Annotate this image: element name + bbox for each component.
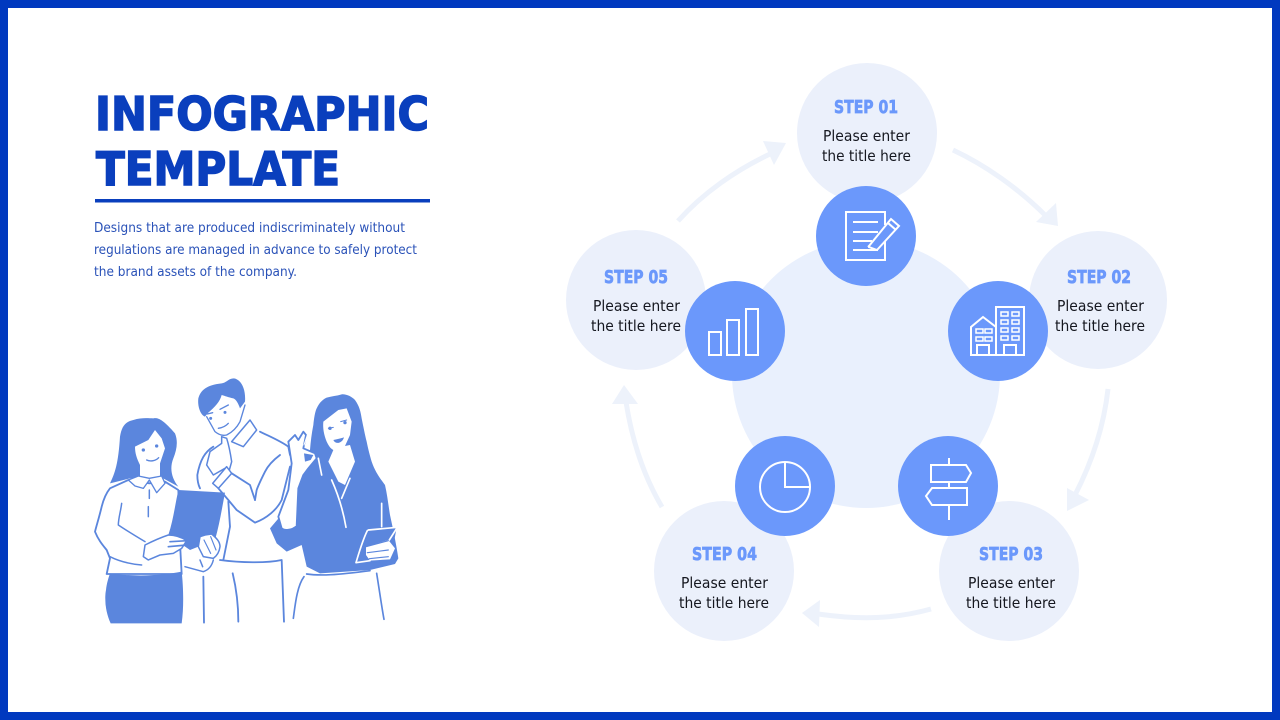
arrow: step 04 to step 05 — [612, 385, 662, 507]
step 02 body: Please enter — [1057, 297, 1145, 315]
step 02 — [948, 231, 1167, 381]
step 05 — [566, 230, 785, 381]
step 01 body: Please enter — [823, 127, 911, 145]
step 04 — [654, 436, 835, 641]
step 03 body: the title here — [966, 594, 1056, 612]
icon: bar chart — [709, 309, 758, 355]
icon: signpost — [926, 458, 971, 520]
description text: Designs that are produced indiscriminately without — [94, 221, 405, 236]
step 03 icon badge — [898, 436, 998, 536]
arrow: step 02 to step 03 — [1067, 389, 1108, 511]
step 05 heading: STEP 05 — [604, 267, 668, 288]
step 01 body: the title here — [822, 147, 911, 165]
step 02 background — [1029, 231, 1167, 369]
illustration: three people with tablets — [95, 378, 398, 623]
step 04 background — [654, 501, 794, 641]
step 01 — [797, 63, 937, 286]
title: INFOGRAPHIC — [95, 87, 429, 141]
step 04 icon badge — [735, 436, 835, 536]
step 01 background — [797, 63, 937, 203]
icon: pie chart — [760, 462, 810, 512]
step 05 body — [591, 297, 681, 335]
step 03 — [898, 436, 1079, 641]
step 05 icon badge — [685, 281, 785, 381]
description text — [94, 221, 417, 280]
step 01 body — [822, 127, 911, 165]
central circle — [732, 240, 1000, 508]
title — [95, 87, 429, 196]
step 05 background — [566, 230, 706, 370]
arrow: step 01 to step 02 — [953, 150, 1058, 226]
step 03 background — [939, 501, 1079, 641]
tablet and holding hands — [143, 490, 225, 572]
person: man — [185, 378, 290, 623]
step 03 body: Please enter — [968, 574, 1056, 592]
step 02 icon badge — [948, 281, 1048, 381]
step 04 body — [679, 574, 769, 612]
step 05 body: Please enter — [593, 297, 681, 315]
step 03 body — [966, 574, 1056, 612]
step 03 heading: STEP 03 — [979, 544, 1043, 565]
description text: the brand assets of the company. — [94, 265, 297, 280]
person: right woman — [270, 394, 398, 619]
step 02 body — [1055, 297, 1145, 335]
description text: regulations are managed in advance to safely protect — [94, 243, 417, 258]
arrow: step 03 to step 04 — [802, 600, 931, 627]
icon: document with pencil — [846, 212, 899, 260]
arrow: step 05 to step 01 — [678, 141, 786, 221]
step 02 body: the title here — [1055, 317, 1145, 335]
step 01 heading: STEP 01 — [834, 97, 898, 118]
person: left woman — [95, 418, 183, 623]
title: TEMPLATE — [96, 142, 340, 196]
step 05 body: the title here — [591, 317, 681, 335]
title underline — [95, 199, 430, 202]
step 04 heading: STEP 04 — [692, 544, 757, 565]
step 04 body: Please enter — [681, 574, 769, 592]
icon: buildings — [971, 307, 1024, 355]
step 02 heading: STEP 02 — [1067, 267, 1131, 288]
step 04 body: the title here — [679, 594, 769, 612]
step 01 icon badge — [816, 186, 916, 286]
